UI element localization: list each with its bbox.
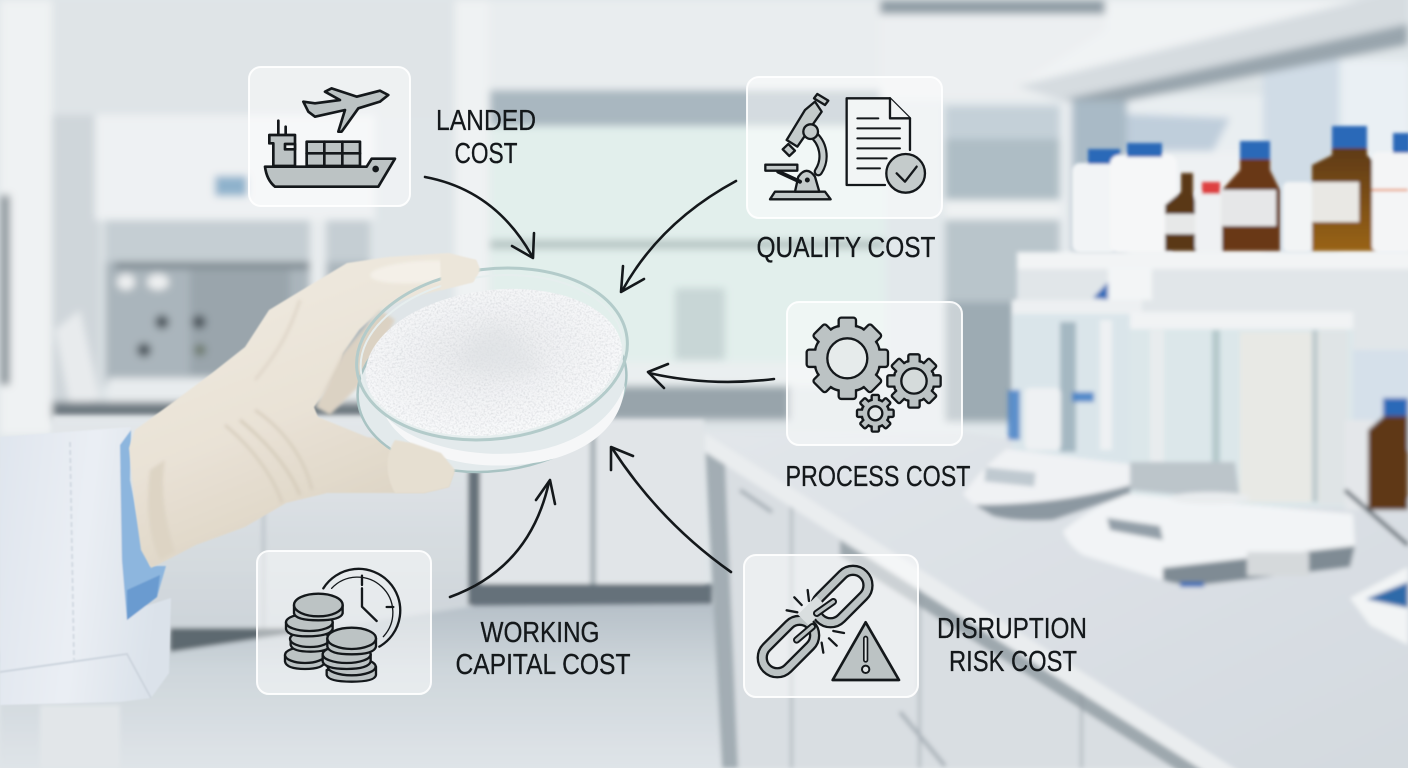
- icon card: process cost: [787, 302, 962, 445]
- lower room: cabinets, floor, bench and balances: [0, 252, 1408, 768]
- icon card: disruption risk cost: [744, 555, 918, 697]
- icon: microscope and checked document: [765, 94, 925, 199]
- front balance: [1130, 312, 1353, 507]
- rear balance: [1012, 300, 1142, 465]
- label: working capital cost: WORKING: [480, 617, 600, 649]
- shirt cuff: [120, 430, 166, 620]
- icon: plane and cargo ship: [265, 88, 395, 187]
- lab coat sleeve: [0, 427, 171, 705]
- powder pile: [357, 275, 631, 451]
- central hood: [460, 0, 880, 92]
- label: landed cost: [436, 105, 536, 170]
- shelf: [1017, 252, 1408, 269]
- petri dish with white powder: [347, 253, 637, 487]
- arrow: disruption risk cost to dish: [611, 447, 731, 572]
- bench top: [705, 432, 1408, 768]
- label: disruption risk cost: RISK COST: [949, 646, 1077, 678]
- gloved hand: [129, 253, 480, 568]
- icon card: landed cost: [249, 67, 410, 206]
- label: process cost: PROCESS COST: [786, 461, 971, 493]
- fingertips over dish rim: [388, 254, 480, 493]
- arrow: process cost to dish: [648, 364, 774, 388]
- bottles on the shelf: [1072, 126, 1408, 253]
- dish base: [348, 283, 636, 487]
- arrow: landed cost to dish: [425, 177, 534, 258]
- label: working capital cost: [456, 617, 631, 681]
- label: landed cost: LANDED: [436, 105, 536, 137]
- lower left cabinets: [52, 416, 472, 631]
- bench cabinets: [712, 450, 1240, 768]
- label: disruption risk cost: DISRUPTION: [937, 613, 1087, 645]
- arrow: working capital cost to dish: [450, 480, 555, 597]
- floor: [0, 604, 800, 768]
- label: quality cost: QUALITY COST: [756, 232, 936, 264]
- icon card: quality cost: [747, 77, 942, 218]
- right edge items: [1345, 420, 1375, 510]
- icon: three gears: [807, 318, 941, 432]
- label: landed cost: COST: [454, 138, 518, 170]
- palm shadows and finger folds: [148, 258, 471, 560]
- back wall and overhead shelf: [1060, 95, 1408, 265]
- icon: broken chain and warning triangle: [756, 564, 899, 680]
- label: working capital cost: CAPITAL COST: [456, 649, 631, 681]
- icon: coins and clock: [285, 569, 400, 682]
- left fume hood: [95, 115, 375, 220]
- arrow: quality cost to dish: [621, 181, 736, 292]
- icon card: working capital cost: [257, 551, 431, 694]
- glass rim: [347, 253, 637, 455]
- label: disruption risk cost: [937, 613, 1087, 678]
